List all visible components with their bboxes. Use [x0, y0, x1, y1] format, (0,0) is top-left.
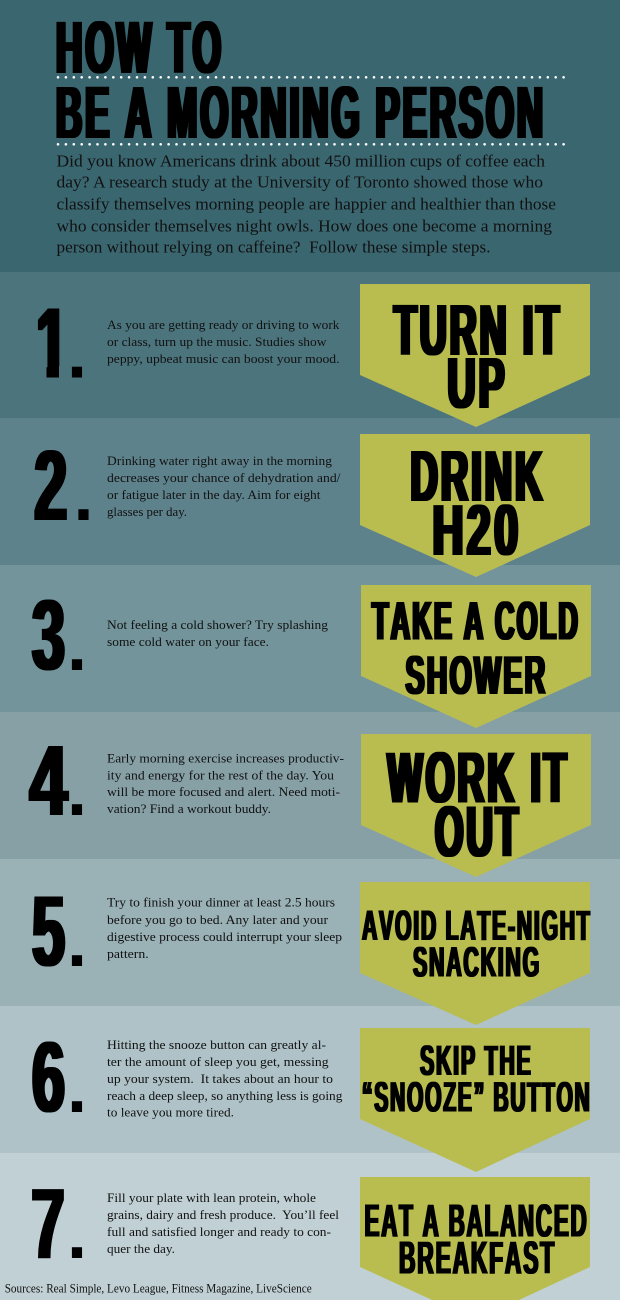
step 2 text: Drinking water right away in the morning	[107, 454, 332, 468]
panel: step 5	[32, 876, 592, 1025]
arrow banner: drink h20	[360, 434, 590, 577]
number 7: 7	[32, 1168, 64, 1280]
arrow banner: eat a balanced breakfast	[360, 1177, 590, 1300]
step 2 text: decreases your chance of dehydration and/	[107, 471, 341, 485]
step 5 text: Try to finish your dinner at least 2.5 hours	[107, 896, 335, 910]
arrow banner: work it out	[361, 734, 591, 877]
number 5: 5	[32, 876, 65, 988]
step 2 text: or fatigue later in the day. Aim for eight	[107, 488, 321, 502]
number 7: .	[67, 1194, 87, 1274]
step 6 text: Hitting the snooze button can greatly al-	[107, 1038, 326, 1052]
sources: Sources: Real Simple, Levo League, Fitness Magazine, LiveScience	[5, 1282, 312, 1296]
step 1 text: peppy, upbeat music can boost your mood.	[107, 352, 340, 366]
step 4 text: vation? Find a workout buddy.	[107, 802, 271, 816]
intro text: person without relying on caffeine? Follow these simple steps.	[56, 237, 491, 256]
step 4 text: will be more focused and alert. Need moti-	[107, 785, 340, 799]
number 3: 3	[32, 580, 65, 692]
step 6 text: ter the amount of sleep you get, messing	[107, 1055, 329, 1069]
number 1: 1	[36, 288, 68, 400]
panel: step 7	[32, 1168, 590, 1300]
number 4: 4	[30, 725, 68, 837]
step 7 text: quer the day.	[107, 1242, 175, 1256]
step 4 text: ity and energy for the rest of the day. You	[107, 768, 334, 782]
panel: step 6	[32, 1022, 592, 1172]
step 7 text: full and satisfied longer and ready to con-	[107, 1225, 331, 1239]
panel: header background	[0, 0, 620, 272]
step 3 text: Not feeling a cold shower? Try splashing	[107, 618, 328, 632]
panel: step 3	[32, 580, 591, 728]
step 5 text	[107, 896, 342, 961]
arrow banner: turn it up: UP	[448, 343, 508, 424]
arrow banner: avoid late-night snacking	[360, 882, 592, 1025]
step 6 text: to leave you more tired.	[107, 1106, 234, 1120]
number 2: 2	[34, 430, 67, 542]
intro text: classify themselves morning people are happier and healthier than those	[56, 194, 556, 213]
panel: step 2	[34, 430, 590, 577]
step 3 text: some cold water on your face.	[107, 635, 269, 649]
step 1 text: As you are getting ready or driving to work	[107, 318, 340, 332]
step 1 text: or class, turn up the music. Studies show	[107, 335, 327, 349]
step 7 text	[107, 1191, 340, 1256]
band: step 2	[0, 418, 620, 565]
number 1	[38, 308, 82, 378]
arrow banner: take a cold shower	[361, 585, 591, 728]
arrow banner: skip the snooze button	[360, 1028, 592, 1172]
title	[56, 6, 568, 154]
band: step 4	[0, 712, 620, 859]
step 1 text	[107, 318, 340, 366]
intro text	[56, 152, 556, 256]
step 6 text: up your system. It takes about an hour to	[107, 1072, 333, 1086]
number 3: .	[67, 606, 87, 686]
step 4 text: Early morning exercise increases productiv-	[107, 751, 344, 765]
band: step 5	[0, 859, 620, 1006]
intro text: who consider themselves night owls. How does one become a morning	[56, 216, 552, 235]
intro text: day? A research study at the University of Toronto showed those who	[56, 172, 543, 192]
band: step 6	[0, 1006, 620, 1153]
step 5 text: before you go to bed. Any later and your	[107, 913, 328, 927]
number 4: .	[67, 751, 87, 831]
panel: step 4	[30, 725, 591, 877]
number 6: 6	[32, 1022, 65, 1134]
arrow banner: work it out: OUT	[435, 792, 521, 872]
number 1: .	[67, 314, 87, 394]
step 3 text	[107, 618, 328, 649]
step 2 text: glasses per day.	[107, 505, 187, 519]
step 4 text	[107, 751, 344, 816]
number 6: .	[67, 1048, 87, 1128]
step 7 text: Fill your plate with lean protein, whole	[107, 1191, 317, 1205]
intro text: Did you know Americans drink about 450 million cups of coffee each	[56, 152, 546, 171]
band: step 3	[0, 565, 620, 712]
step 5 text: pattern.	[107, 947, 149, 961]
arrow banner: turn it up	[360, 284, 590, 427]
number 2: .	[74, 456, 94, 536]
panel: step 1	[36, 284, 590, 427]
band: step 1	[0, 272, 620, 418]
number 5: .	[67, 902, 87, 982]
title: HOW TO	[56, 6, 224, 89]
step 6 text	[107, 1038, 342, 1120]
band: step 7	[0, 1153, 620, 1300]
step 7 text: grains, dairy and fresh produce. You’ll feel	[107, 1208, 340, 1222]
step 5 text: digestive process could interrupt your sleep	[107, 930, 342, 944]
arrow banner: drink h20: H20	[432, 490, 522, 571]
step 6 text: reach a deep sleep, so anything less is going	[107, 1089, 342, 1103]
step 2 text	[107, 454, 341, 519]
